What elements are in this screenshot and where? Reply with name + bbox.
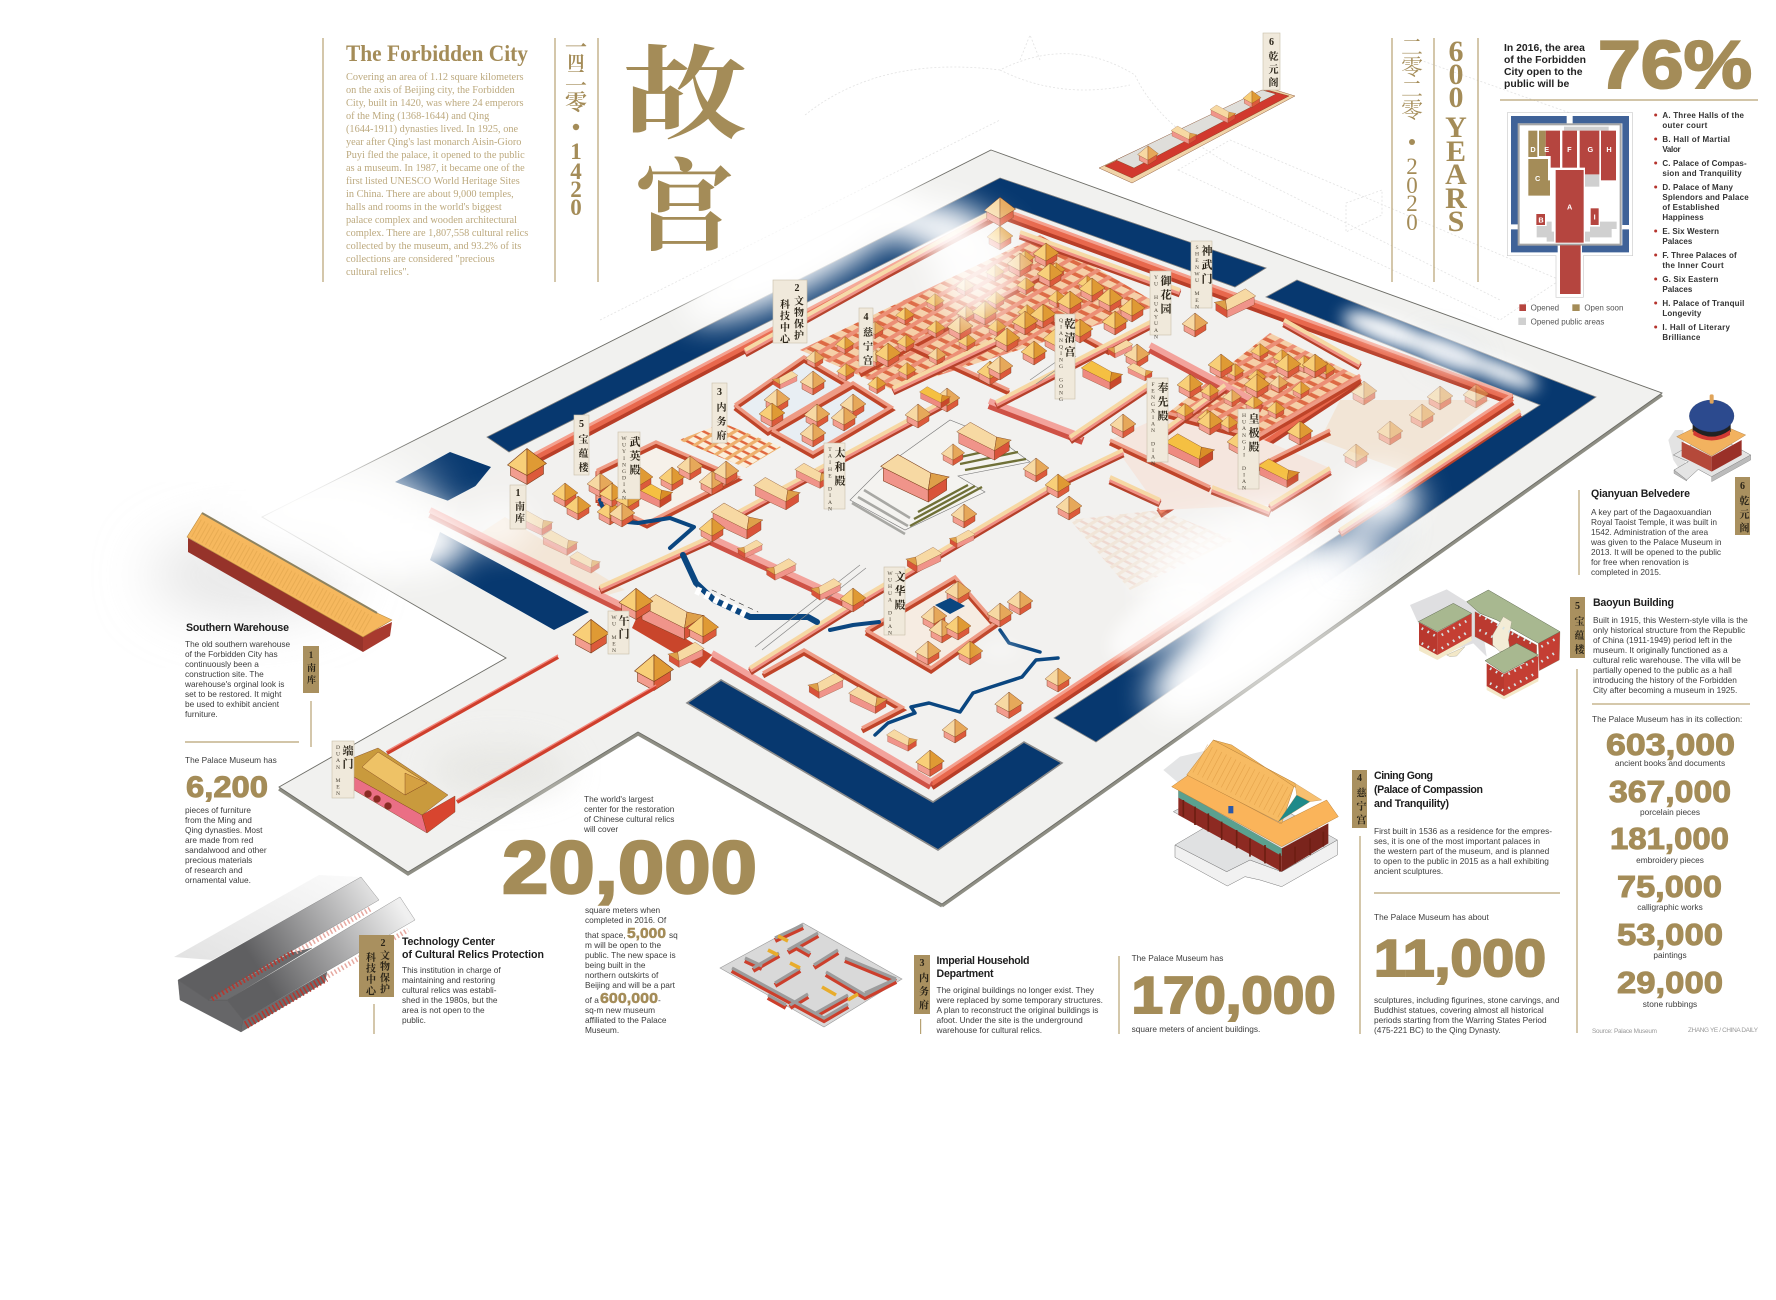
collection statistics: paintings <box>1653 950 1687 960</box>
year column 1420: 1 <box>570 139 582 164</box>
plan key list: G. Six Eastern <box>1662 275 1718 284</box>
collection statistics: embroidery pieces <box>1636 855 1704 865</box>
plan legend <box>1518 304 1623 326</box>
plan map of the palace: E <box>1544 145 1549 154</box>
text: Baoyun Building: only historical structure from the Republic <box>1593 625 1745 635</box>
plan map of the palace: A <box>1567 202 1573 211</box>
heading: 600 years: 0 <box>1448 58 1464 91</box>
label: Taihe Dian: TAIHE DIAN <box>827 447 833 513</box>
plan key list: H. Palace of Tranquil <box>1662 299 1744 308</box>
tag: 3 neiwufu: 3内务府 <box>916 958 928 1013</box>
stat: 170,000 ancient buildings: 170,000 <box>1132 967 1336 1025</box>
plan key list: D. Palace of Many <box>1662 183 1734 192</box>
stat: 76 percent open <box>1500 27 1758 103</box>
intro paragraph: palace complex and wooden architectural <box>346 215 517 226</box>
stat: 11,000 sculptures: The Palace Museum has about <box>1374 912 1490 922</box>
moat: north chevron <box>487 178 1266 452</box>
text: Technology Center: shed in the 1980s, but the <box>402 995 498 1005</box>
stat: 20,000 restoration centre: being built in the <box>585 960 646 970</box>
label: 5 Baoyun <box>574 415 589 476</box>
stat: 76 percent open: of the Forbidden <box>1504 55 1586 66</box>
text: Cining Gong: to open to the public in 2015 as a hall exhibiting <box>1374 856 1549 866</box>
stat: 20,000 restoration centre: sq-m new museum <box>585 1005 655 1015</box>
year column 2020: 零 <box>1401 98 1423 123</box>
label: 2 technology centre: 科技中心 <box>778 298 790 345</box>
label: Wuying Dian <box>618 432 640 502</box>
label: Shenwu Men: SHENWU MEN <box>1194 245 1200 311</box>
text: Southern Warehouse: Southern Warehouse <box>186 622 289 634</box>
plan key list: E. Six Western <box>1662 227 1719 236</box>
heading: 600 years: S <box>1448 205 1464 238</box>
label: Fengxian Dian: FENGXIAN DIAN <box>1150 382 1156 468</box>
text: Southern Warehouse: The old southern warehouse <box>185 639 291 649</box>
stat: 11,000 sculptures: Buddhist statues, covering almost all historical <box>1374 1005 1544 1015</box>
intro paragraph: collected by the museum, and 93.2% of its <box>346 241 521 252</box>
text: Southern Warehouse: warehouse's orginal look is <box>184 679 284 689</box>
plan key list: A. Three Halls of the <box>1662 111 1745 120</box>
plan key list: C. Palace of Compas- <box>1662 159 1747 168</box>
great halls <box>699 197 1082 612</box>
tag: 6 qianyuan <box>1735 477 1750 536</box>
stat: 20,000 restoration centre: 5,000 <box>627 926 666 942</box>
text: Cining Gong: Cining Gong <box>1374 770 1433 782</box>
building: Duan Men gate <box>353 748 455 833</box>
text: Baoyun Building: introducing the history of the Forbidden <box>1593 675 1737 685</box>
collection statistics: calligraphic works <box>1637 902 1703 912</box>
text: Qianyuan Belvedere: was given to the Palace Museum in <box>1590 537 1722 547</box>
text: Southern Warehouse: of the Forbidden City has <box>185 649 278 659</box>
label: 3 Neiwufu <box>712 383 727 444</box>
text: Technology Center: public. <box>402 1015 426 1025</box>
plan key list: Brilliance <box>1662 333 1701 342</box>
intro paragraph: year after Qing's last monarch Aisin-Gioro <box>346 137 521 148</box>
source credits <box>1592 1027 1759 1035</box>
plan key list: Longevity <box>1662 309 1702 318</box>
text: Imperial Household Department: were replaced by some temporary structures. <box>936 995 1103 1005</box>
year column 1420: 0 <box>570 195 582 220</box>
text: Qianyuan Belvedere: for free when renovation is <box>1591 557 1689 567</box>
year column 1420: 一 <box>565 35 587 60</box>
collection statistics: 29,000 <box>1617 965 1723 1000</box>
plan legend: Opened <box>1531 304 1559 313</box>
label: Huangji Dian <box>1238 409 1260 492</box>
building: north compound with Qianyuan Belvedere <box>1099 88 1295 183</box>
stat: 170,000 ancient buildings: square meters of ancient buildings. <box>1132 1024 1260 1034</box>
label: Wu Men: WU MEN <box>611 615 617 655</box>
plan map of the palace: B <box>1538 216 1544 225</box>
stat: 20,000 restoration centre: - <box>658 995 661 1005</box>
collection statistics: The Palace Museum has in its collection: <box>1592 714 1742 724</box>
stat: 6,200 furniture: from the Ming and <box>185 815 252 825</box>
big calligraphy title: 故 <box>623 13 747 160</box>
map labels <box>332 33 1280 798</box>
label: 6 Qianyuan: 6乾元阁 <box>1266 37 1278 90</box>
text: Cining Gong: and Tranquility) <box>1374 798 1449 810</box>
stat: 76 percent open: In 2016, the area <box>1504 43 1585 54</box>
title: The Forbidden City <box>346 41 528 66</box>
source credits: Source: Palace Museum <box>1592 1028 1657 1035</box>
label: Fengxian Dian <box>1147 378 1168 468</box>
buildings: Wuying Hall compound <box>508 448 739 527</box>
text: Cining Gong: ancient sculptures. <box>1374 866 1443 876</box>
stat: 6,200 furniture: are made from red <box>185 835 254 845</box>
stat: 6,200 furniture: of research and <box>185 865 243 875</box>
plan key list: I. Hall of Literary <box>1662 323 1731 332</box>
tag: 5 baoyun <box>1570 597 1585 658</box>
text: Technology Center: cultural relics was establi- <box>402 985 497 995</box>
moat: south chevron <box>687 680 1062 850</box>
intro paragraph: in China. There are about 9,000 temples, <box>346 189 514 200</box>
heading: 600 years: 6 <box>1448 35 1464 68</box>
stat: 11,000 sculptures: periods starting from the Warring States Period <box>1374 1015 1547 1025</box>
text: Qianyuan Belvedere: Qianyuan Belvedere <box>1591 488 1690 500</box>
label: Huangji Dian: HUANGJI DIAN <box>1241 413 1247 492</box>
moat: west <box>395 452 491 505</box>
text: Technology Center: of Cultural Relics Protection <box>402 949 544 961</box>
buildings: Wuhua compound and south <box>808 581 1071 776</box>
year column 2020: 二 <box>1401 77 1423 102</box>
text: Technology Center: area is not open to the <box>402 1005 485 1015</box>
platform: imperial city base <box>262 150 1662 906</box>
label: Shenwu Men: 神武门 <box>1200 244 1212 287</box>
plan legend: Open soon <box>1584 304 1623 313</box>
plan key list: Valor <box>1662 145 1681 154</box>
year column 2020: 二 <box>1401 35 1423 60</box>
clouds over the map <box>210 159 1541 746</box>
text: Baoyun Building <box>1570 597 1750 1033</box>
stat: 11,000 sculptures: sculptures, including figurines, stone carvings, and <box>1374 995 1560 1005</box>
year column 2020: 0 <box>1406 210 1418 235</box>
label: Wuying Dian: 武英殿 <box>628 436 640 478</box>
text: Imperial Household Department: A plan to reconstruct the original buildings is <box>936 1005 1098 1015</box>
text: Baoyun Building: museum. It originally functioned as a <box>1593 645 1728 655</box>
moats <box>395 178 1596 850</box>
tag: 2 technology centre: 科技中心 <box>364 951 376 997</box>
plan key list: Splendors and Palace <box>1662 193 1749 202</box>
stat: 6,200 furniture: precious materials <box>185 855 252 865</box>
stat: 20,000 restoration centre: of Chinese cultural relics <box>584 814 674 824</box>
plan map of the palace: D <box>1530 145 1536 154</box>
terrace of the three great halls <box>850 420 1030 534</box>
text: Qianyuan Belvedere: completed in 2015. <box>1591 567 1661 577</box>
label: Taihe Dian: 太和殿 <box>833 446 846 489</box>
moat: southwest <box>430 532 589 630</box>
intro block <box>323 38 528 282</box>
big calligraphy title: 宫 <box>634 127 734 271</box>
label: Wuhua Dian <box>884 567 906 637</box>
building: Hall of Central Harmony <box>941 444 965 466</box>
stat: 11,000 sculptures: (475-221 BC) to the Qing Dynasty. <box>1374 1025 1501 1035</box>
collection statistics: stone rubbings <box>1643 999 1697 1009</box>
plan key list: sion and Tranquility <box>1662 169 1742 178</box>
stat: 170,000 ancient buildings <box>1119 953 1336 1034</box>
year column 1420: 二 <box>565 66 587 91</box>
plan key list <box>1654 111 1749 342</box>
text: Baoyun Building: partially opened to the public as a hall <box>1593 665 1732 675</box>
text: Cining Gong: First built in 1536 as a residence for the empres- <box>1374 826 1552 836</box>
text: Southern Warehouse <box>184 622 319 747</box>
collection statistics: porcelain pieces <box>1640 807 1700 817</box>
illustration: Cining Gong <box>1163 740 1338 887</box>
heading: 600 years <box>1445 35 1467 238</box>
intro paragraph: cultural relics". <box>346 267 409 278</box>
label: 6 Qianyuan <box>1263 33 1280 90</box>
stat: 6,200 furniture: The Palace Museum has <box>185 755 277 765</box>
text: Technology Center <box>359 935 544 1034</box>
stat: 20,000 restoration centre: completed in 2016. Of <box>585 915 667 925</box>
stat: 20,000 restoration centre: 20,000 <box>502 826 757 909</box>
buildings: inner northwest compounds <box>759 371 866 447</box>
stat: 20,000 restoration centre: center for the restoration <box>584 804 675 814</box>
building: Hall of Supreme Harmony <box>881 455 949 502</box>
plan map of the palace <box>1507 111 1749 342</box>
heading: 600 years: R <box>1445 182 1467 215</box>
faint sketch of Jingshan hill and north streets <box>600 35 1590 340</box>
text: Technology Center: This institution in charge of <box>402 965 501 975</box>
year column 2020: 2 <box>1406 154 1418 179</box>
label: Qianqing Gong: QIANQING GONG <box>1058 318 1064 404</box>
intro paragraph: Puyi fled the palace, it opened to the public <box>346 150 525 161</box>
big calligraphy title <box>623 13 747 271</box>
heading: 600 years: A <box>1445 158 1467 191</box>
year column 1420: 2 <box>570 177 582 202</box>
label: Yu Huayuan <box>1150 271 1172 341</box>
text: Technology Center: Technology Center <box>402 936 495 948</box>
collection statistics: 181,000 <box>1610 821 1729 856</box>
stat: 20,000 restoration centre: square meters when <box>585 905 661 915</box>
text: Cining Gong <box>1352 770 1560 1034</box>
buildings: Wu Men gate <box>573 588 719 690</box>
stat: 20,000 restoration centre: The world's largest <box>584 794 654 804</box>
river: golden water <box>600 500 1058 735</box>
stat: 20,000 restoration centre: northern outskirts of <box>585 970 659 980</box>
label: Taihe Dian <box>824 443 846 513</box>
label: Huangji Dian: 皇极殿 <box>1247 412 1260 455</box>
stat: 20,000 restoration centre: Museum. <box>585 1025 619 1035</box>
year column 1420: 零 <box>565 90 587 115</box>
year column 2020: 2 <box>1406 191 1418 216</box>
plan key list: F. Three Palaces of <box>1662 251 1737 260</box>
tag: 5 baoyun: 5宝蕴楼 <box>1572 601 1584 658</box>
intro paragraph: Covering an area of 1.12 square kilometers <box>346 72 524 83</box>
walls: outer red palace walls <box>527 208 1512 786</box>
label: 2 technology centre: 2文物保护 <box>792 283 804 342</box>
text: Imperial Household Department: Imperial Household <box>936 955 1030 967</box>
label: Fengxian Dian: 奉先殿 <box>1156 381 1168 424</box>
label: Shenwu Men <box>1191 241 1212 311</box>
palace courtyard floor <box>430 210 1512 782</box>
stat: 20,000 restoration centre: affiliated to the Palace <box>585 1015 667 1025</box>
illustration: Imperial Household Department <box>720 923 902 1027</box>
intro paragraph: first listed UNESCO World Heritage Sites <box>346 176 520 187</box>
text: Qianyuan Belvedere <box>1579 477 1750 577</box>
source credits: ZHANG YE / CHINA DAILY <box>1688 1027 1759 1034</box>
plan map of the palace: H <box>1606 145 1612 154</box>
label: 4 Cining: 4慈宁宫 <box>860 312 872 369</box>
year column 1420: 4 <box>570 159 582 184</box>
plan key list: of Established <box>1662 203 1719 212</box>
text: Imperial Household Department: warehouse for cultural relics. <box>936 1025 1042 1035</box>
stat: 11,000 sculptures: 11,000 <box>1374 930 1546 988</box>
label: Qianqing Gong: 乾清宫 <box>1063 317 1076 360</box>
tag: 1 warehouse: 1南库 <box>306 650 316 687</box>
tag: 4 cining <box>1352 770 1367 828</box>
intro paragraph: on the axis of Beijing city, the Forbidden <box>346 85 515 96</box>
collection statistics: 75,000 <box>1617 869 1722 904</box>
text: Cining Gong: (Palace of Compassion <box>1374 784 1483 796</box>
text: Cining Gong: the western part of the museum, and is planned <box>1374 846 1550 856</box>
stat: 6,200 furniture: 6,200 <box>186 771 268 804</box>
label: Duan Men <box>332 741 354 798</box>
plan key list: B. Hall of Martial <box>1662 135 1730 144</box>
stat: 20,000 restoration centre <box>502 794 757 1035</box>
stat: 20,000 restoration centre: public. The new space is <box>585 950 676 960</box>
stat: 6,200 furniture <box>185 755 277 885</box>
collection statistics: 53,000 <box>1617 917 1723 952</box>
plan legend: Opened public areas <box>1531 317 1604 326</box>
text: Imperial Household Department: afoot. Under the site is the underground <box>936 1015 1083 1025</box>
label: 3 Neiwufu: 3内务府 <box>714 387 726 444</box>
heading: 600 years: 0 <box>1448 81 1464 114</box>
tag: 2 technology centre <box>359 935 394 997</box>
plan map of the palace: F <box>1567 145 1572 154</box>
buildings: eastern palaces and Ningshou <box>1110 289 1335 488</box>
central axis road <box>755 352 1076 650</box>
label: Wu Men <box>608 611 630 655</box>
year column 2020: 零 <box>1401 55 1423 80</box>
stat: 76 percent open: City open to the <box>1504 67 1583 78</box>
buildings: pale east and southern warehouse court <box>517 381 1489 573</box>
stat: 76 percent open: 76% <box>1598 27 1752 103</box>
text: Imperial Household Department: The original buildings no longer exist. They <box>936 985 1095 995</box>
label: 1 southern warehouse: 1南库 <box>512 488 524 525</box>
illustration: Southern Warehouse <box>187 513 392 652</box>
stat: 20,000 restoration centre: that space, <box>585 930 626 940</box>
plan key list: Happiness <box>1662 213 1704 222</box>
label: 2 technology centre <box>773 280 807 345</box>
intro paragraph: complex. There are 1,807,558 cultural relics <box>346 228 528 239</box>
walls: inner courts <box>430 215 1520 786</box>
text: Southern Warehouse: construction site. The <box>185 669 264 679</box>
intro paragraph: (1644-1911) dynasties lived. In 1925, one <box>346 124 518 135</box>
year column 1420: 四 <box>568 53 584 72</box>
stat: 6,200 furniture: ornamental value. <box>185 875 251 885</box>
heading: 600 years: E <box>1446 135 1466 168</box>
text: Baoyun Building: Baoyun Building <box>1593 597 1674 609</box>
intro paragraph: as a museum. In 1987, it became one of the <box>346 163 525 174</box>
collection statistics: ancient books and documents <box>1615 758 1725 768</box>
text: Baoyun Building: cultural relic warehouse. The villa will be <box>1593 655 1741 665</box>
stat: 20,000 restoration centre: sq <box>669 930 678 940</box>
collection statistics: 367,000 <box>1609 774 1731 809</box>
stat: 6,200 furniture: Qing dynasties. Most <box>185 825 263 835</box>
year column 2020: 0 <box>1406 173 1418 198</box>
text: Qianyuan Belvedere: A key part of the Dagaoxuandian <box>1591 507 1712 517</box>
text: Southern Warehouse: furniture. <box>185 709 218 719</box>
stat: 20,000 restoration centre: m will be open to the <box>585 940 661 950</box>
text: Technology Center: maintaining and restoring <box>402 975 496 985</box>
illustration: Technology Center <box>174 875 415 1032</box>
label: Wuying Dian: WUYINGDIAN <box>621 436 627 502</box>
intro paragraph: collections are considered "precious <box>346 254 495 265</box>
text: Southern Warehouse: set to be restored. It might <box>185 689 282 699</box>
gray mist behind warehouse <box>150 533 350 617</box>
stat: 20,000 restoration centre: will cover <box>583 824 618 834</box>
label: Yu Huayuan: YU HUAYUAN <box>1153 275 1159 341</box>
plan map of the palace: I <box>1594 212 1596 221</box>
tag: 4 cining: 4慈宁宫 <box>1354 773 1366 828</box>
text: Southern Warehouse: be used to exhibit ancient <box>185 699 280 709</box>
label: Duan Men: DUAN MEN <box>335 745 341 798</box>
text: Qianyuan Belvedere: 2013. It will be opened to the public <box>1591 547 1721 557</box>
intro paragraph: of the Ming (1368-1644) and Qing <box>346 111 489 122</box>
year column 2020 <box>1392 35 1478 282</box>
plan map of the palace: C <box>1535 174 1541 183</box>
plan key list: outer court <box>1662 121 1708 130</box>
stat: 20,000 restoration centre: 600,000 <box>600 991 658 1007</box>
text: Baoyun Building: Built in 1915, this Western-style villa is the <box>1593 615 1748 625</box>
plan key list: Palaces <box>1662 285 1693 294</box>
label: Qianqing Gong <box>1055 314 1076 404</box>
label: 5 Baoyun: 5宝蕴楼 <box>576 419 588 476</box>
plan key list: the Inner Court <box>1662 261 1724 270</box>
tag: 6 qianyuan: 6乾元阁 <box>1737 481 1749 536</box>
text: Imperial Household Department <box>914 955 1103 1035</box>
intro paragraph: City, built in 1420, was where 24 emperors <box>346 98 524 109</box>
label: Wuhua Dian: 文华殿 <box>893 570 906 613</box>
stat: 6,200 furniture: sandalwood and other <box>185 845 267 855</box>
buildings: Qianqing and western palaces <box>806 226 1153 408</box>
stat: 20,000 restoration centre: Beijing and will be a part <box>585 980 676 990</box>
text: Southern Warehouse: continuously been a <box>185 659 259 669</box>
collection statistics <box>1592 714 1742 1009</box>
stat: 170,000 ancient buildings: The Palace Museum has <box>1132 953 1223 963</box>
dense palace courts <box>470 235 1490 668</box>
plan map of the palace: G <box>1587 145 1593 154</box>
text: Baoyun Building: of China (1911-1949) period left in the <box>1593 635 1733 645</box>
plan key list: Palaces <box>1662 237 1693 246</box>
text: Qianyuan Belvedere: 1542. Administration of the area <box>1591 527 1709 537</box>
label: Wuhua Dian: WUHUA DIAN <box>887 571 893 637</box>
label: Wu Men: 午门 <box>617 614 630 641</box>
text: Cining Gong: ses, it is one of the most important palaces in <box>1374 836 1540 846</box>
stat: 20,000 restoration centre: of a <box>585 995 599 1005</box>
text: Qianyuan Belvedere: Royal Taoist Temple, it was built in <box>1591 517 1717 527</box>
heading: 600 years: Y <box>1445 111 1467 144</box>
year column 1420 <box>555 35 598 282</box>
intro paragraph: halls and rooms in the world's biggest <box>346 202 502 213</box>
stat: 6,200 furniture: pieces of furniture <box>185 805 251 815</box>
buildings: gates and halls along central walls <box>699 197 1082 612</box>
tag: 2 technology centre: 2文物保护 <box>378 938 390 995</box>
stat: 76 percent open: public will be <box>1504 79 1569 90</box>
illustration: Qianyuan Belvedere <box>1668 394 1751 482</box>
label: Yu Huayuan: 御花园 <box>1159 274 1172 317</box>
illustration: Baoyun Building <box>1410 589 1560 699</box>
tag: 3 neiwufu <box>914 955 930 1014</box>
text: Imperial Household Department: Department <box>936 968 994 980</box>
walls: Duan Men side walls <box>387 655 656 802</box>
text: Baoyun Building: City after becoming a museum in 1925. <box>1593 685 1737 695</box>
label: 1 southern warehouse <box>510 485 526 529</box>
collection statistics: 603,000 <box>1606 727 1735 762</box>
moat: east <box>1054 280 1596 742</box>
building: Hall of Preserving Harmony <box>957 422 1011 460</box>
stat: 11,000 sculptures <box>1374 912 1560 1035</box>
label: Duan Men: 端门 <box>341 744 354 771</box>
